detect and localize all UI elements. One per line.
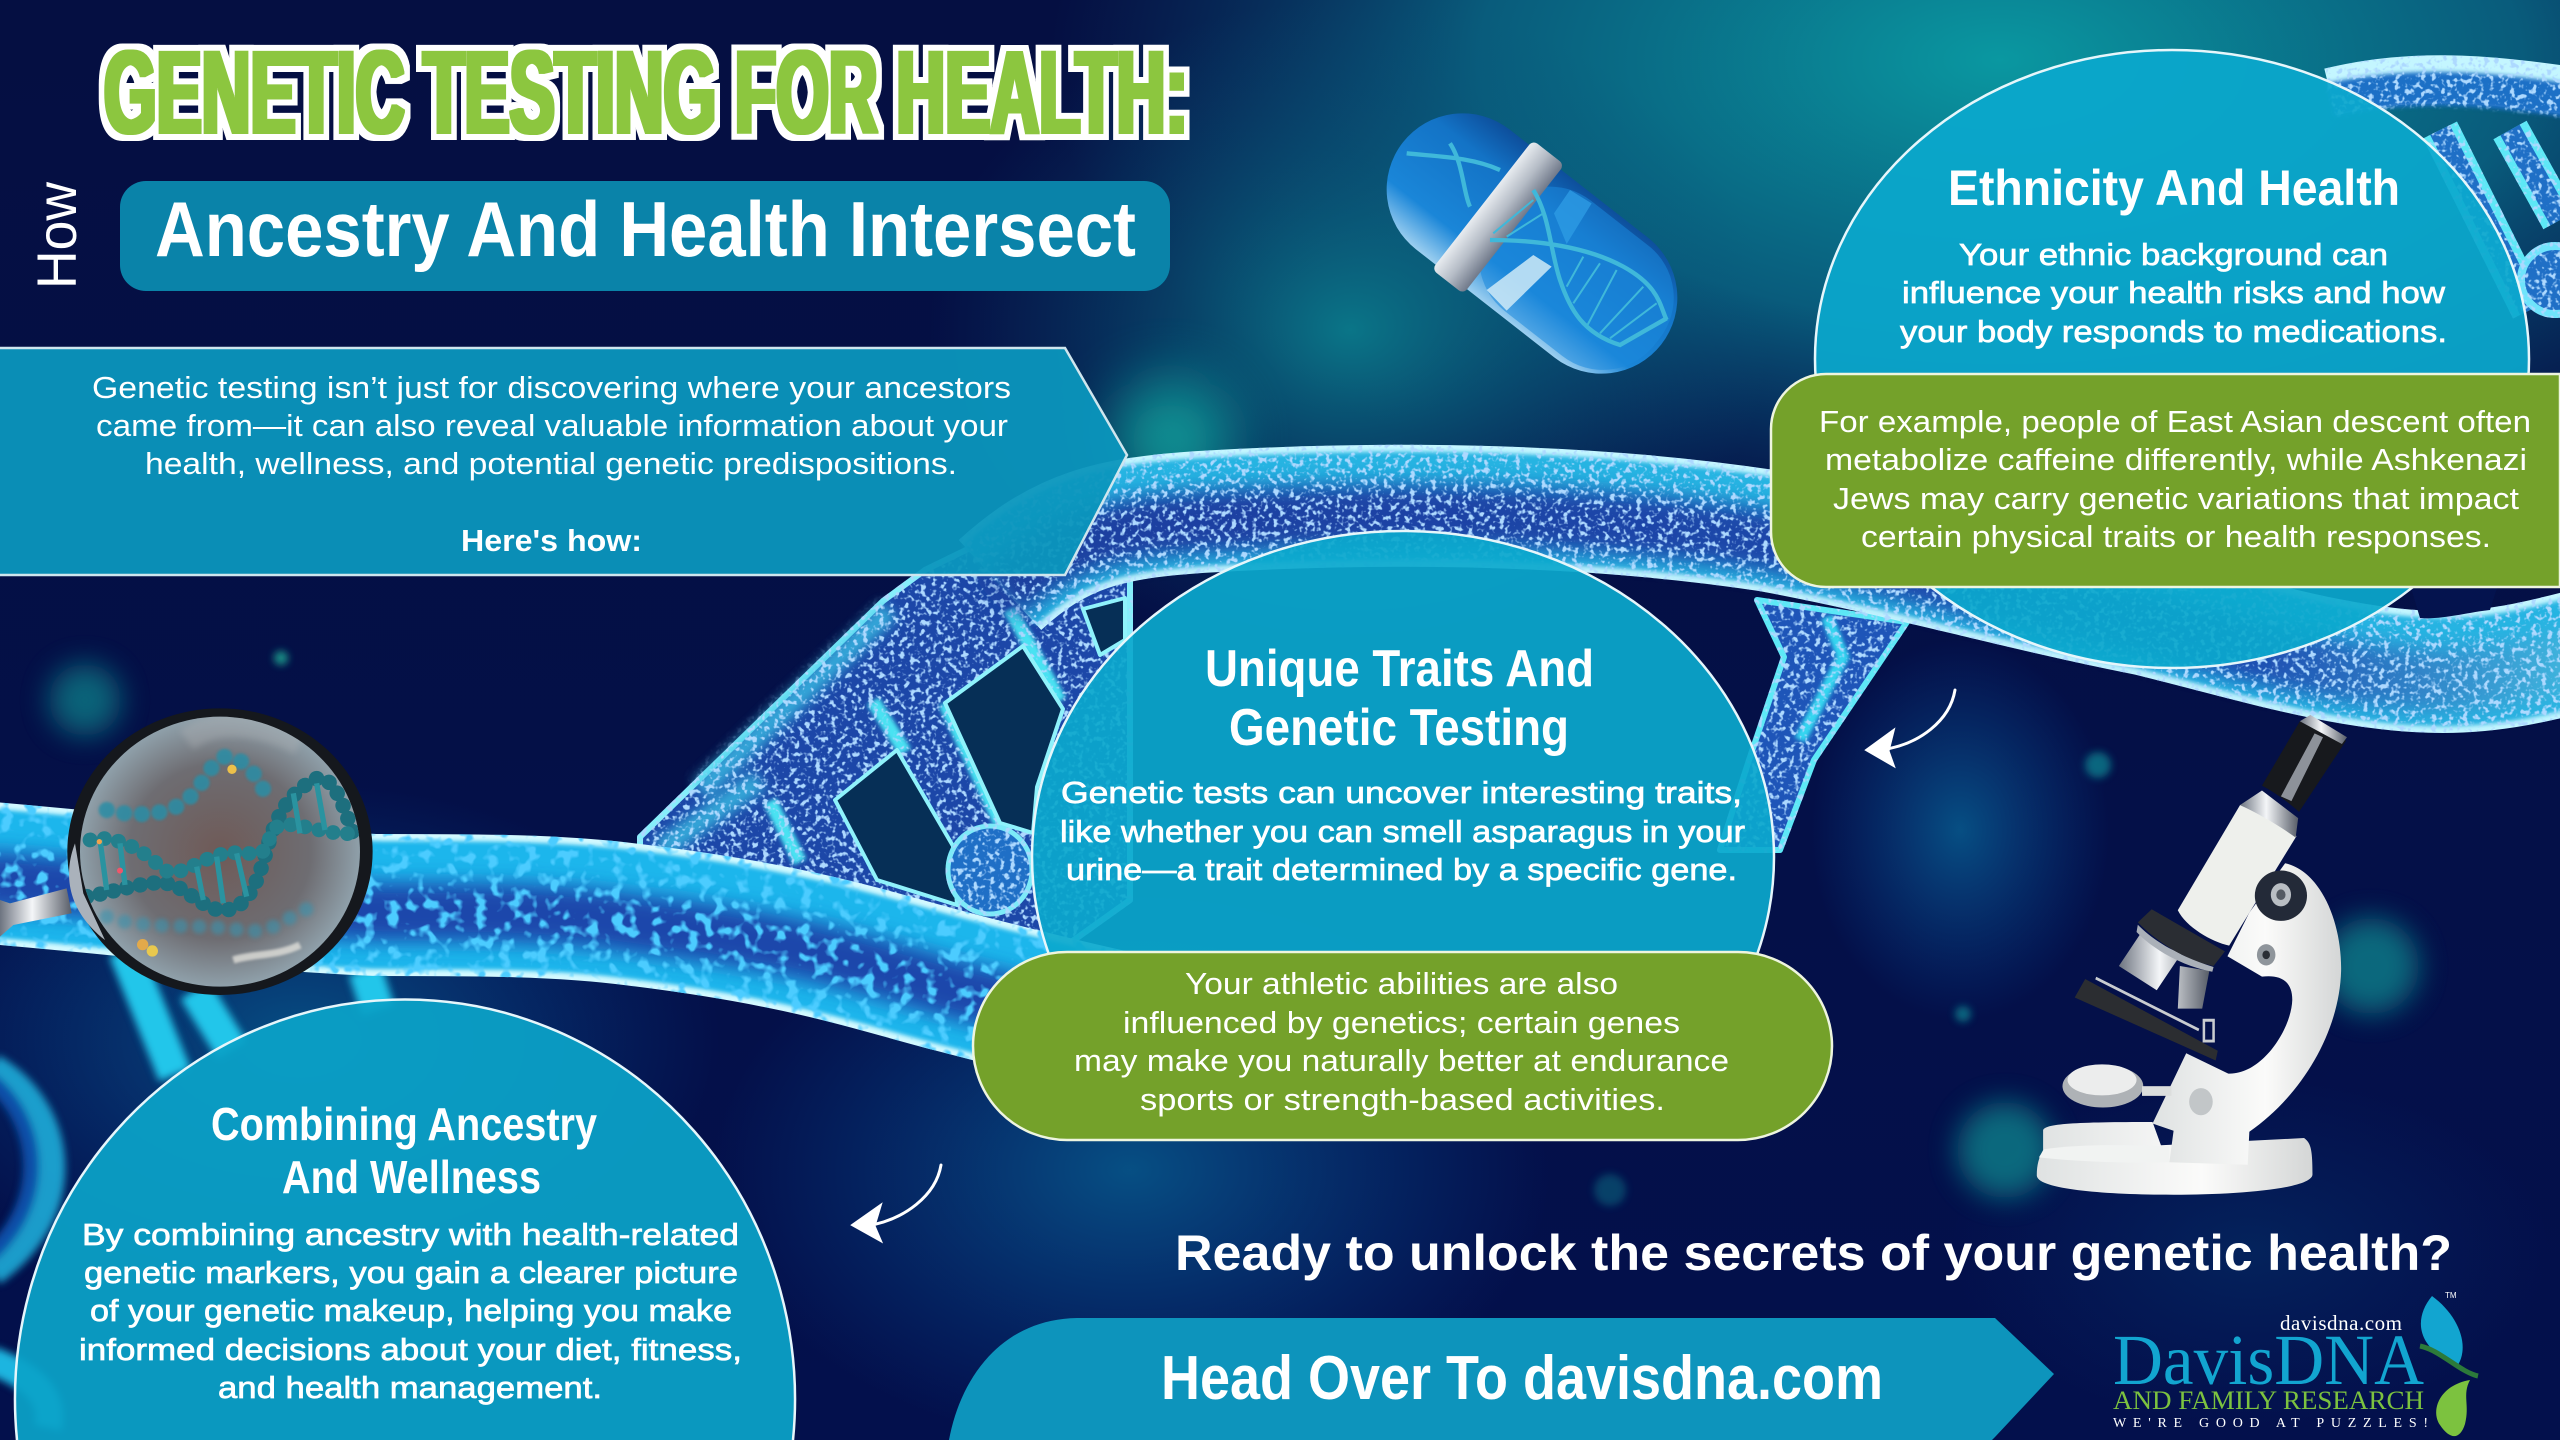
dna strand: main upper [1000, 506, 2560, 680]
microscope body tube [2178, 805, 2296, 946]
panel: intro arrow [0, 348, 1127, 575]
dna strand: main lower [0, 872, 1250, 1056]
microscope eyepiece [2262, 721, 2346, 812]
dna window right [2411, 588, 2497, 618]
body: unique traits: urine—a trait determined by a specific gene. [1066, 852, 1737, 887]
intro text: Genetic testing isn’t just for discovering where your ancestors [92, 370, 1011, 405]
microscope base [2037, 1122, 2312, 1195]
dna knob [948, 826, 1032, 914]
logo: davisdna: WE'RE GOOD AT PUZZLES! [2113, 1416, 2428, 1431]
call to action banner: Head Over To davisdna.com [1161, 1344, 1883, 1413]
body: ethnicity and health: Your ethnic background can [1959, 237, 2388, 272]
body: combining ancestry [79, 1217, 742, 1405]
microscope mirror [2062, 1064, 2171, 1108]
body: ethnicity and health: your body responds to medications. [1900, 314, 2447, 349]
magnifier lens [80, 717, 360, 987]
body: combining ancestry: By combining ancestry with health-related [82, 1217, 739, 1252]
body: combining ancestry: of your genetic makeup, helping you make [90, 1293, 732, 1328]
logo leaves [2420, 1296, 2478, 1436]
callout: east asian and ashkenazi example: For example, people of East Asian descent often [1819, 404, 2531, 439]
call to action banner [949, 1318, 2054, 1440]
dna lower left rungs [0, 950, 378, 1428]
intro text: Here's how: [461, 523, 642, 558]
stage clip [2096, 978, 2214, 1041]
logo: davisdna: DavisDNA [2113, 1320, 2424, 1400]
turret ring [2137, 925, 2214, 972]
magnifier clasp [69, 843, 105, 940]
fine knob [2257, 944, 2275, 965]
dna right rung [1720, 600, 1907, 850]
heading: unique traits [1205, 640, 1594, 757]
heading: unique traits: Genetic Testing [1229, 699, 1569, 757]
logo: davisdna: TM [2445, 1291, 2457, 1300]
microscope collar [2240, 791, 2298, 838]
heading: combining ancestry [211, 1098, 597, 1203]
magnifier handle [0, 888, 72, 937]
heading: ethnicity and health: Ethnicity And Health [1948, 160, 2400, 216]
body: unique traits: Genetic tests can uncover interesting traits, [1061, 775, 1742, 810]
focus knob [2255, 870, 2307, 921]
logo: davisdna: davisdna.com [2280, 1311, 2402, 1335]
dna ladder windows [835, 598, 1125, 905]
eyepiece cap [2300, 715, 2347, 744]
callout: athletic abilities: sports or strength-based activities. [1140, 1082, 1665, 1117]
intro text: came from—it can also reveal valuable information about your [96, 408, 1008, 443]
microscope objectives [2119, 934, 2209, 1009]
arrow: pointing to ethnicity [1867, 690, 1955, 765]
logo: davisdna [2113, 1291, 2478, 1436]
logo: davisdna: AND FAMILY RESEARCH [2113, 1386, 2424, 1415]
microscope stage [2075, 979, 2218, 1060]
body: combining ancestry: and health management. [218, 1370, 602, 1405]
pivot screw [2189, 1088, 2213, 1115]
body: unique traits [1060, 775, 1745, 887]
body: ethnicity and health [1900, 237, 2447, 349]
callout: east asian and ashkenazi example: metabolize caffeine differently, while Ashkenazi [1825, 442, 2527, 477]
body: combining ancestry: genetic markers, you gain a clearer picture [84, 1255, 738, 1290]
icon: dna capsule [1352, 78, 1712, 409]
callout: east asian and ashkenazi example: Jews may carry genetic variations that impact [1833, 481, 2519, 516]
icon: microscope [2037, 715, 2347, 1195]
panel: unique traits and genetic testing [973, 531, 1832, 1183]
magnifier rim [67, 708, 373, 995]
heading: combining ancestry: Combining Ancestry [211, 1098, 597, 1150]
magnifier dna [87, 725, 353, 960]
microscope turret [2138, 909, 2225, 966]
title: GENETIC TESTING FOR HEALTH: [104, 27, 1188, 159]
panel: ethnicity and health [1771, 50, 2560, 668]
dna ladder segment [640, 470, 1130, 950]
microscope arm [2153, 863, 2341, 1165]
callout: east asian and ashkenazi example [1771, 374, 2560, 587]
body: ethnicity and health: influence your health risks and how [1902, 275, 2446, 310]
callout: athletic abilities: influenced by genetics; certain genes [1123, 1005, 1680, 1040]
body: combining ancestry: informed decisions about your diet, fitness, [79, 1332, 742, 1367]
subtitle word: How: How [25, 181, 88, 289]
body: unique traits: like whether you can smell asparagus in your [1060, 814, 1745, 849]
arrow: pointing to combining ancestry [853, 1165, 941, 1240]
callout: east asian and ashkenazi example: certain physical traits or health responses. [1861, 519, 2491, 554]
capsule dna and highlights [1407, 143, 1667, 345]
callout: athletic abilities: Your athletic abilities are also [1185, 966, 1618, 1001]
intro text: health, wellness, and potential genetic predispositions. [145, 446, 957, 481]
callout: athletic abilities: may make you naturally better at endurance [1074, 1043, 1729, 1078]
panel: combining ancestry and wellness [15, 1000, 795, 1440]
heading: combining ancestry: And Wellness [282, 1151, 541, 1203]
heading: unique traits: Unique Traits And [1205, 640, 1594, 698]
eyepiece highlight [2281, 733, 2323, 801]
dna strand: top right [2330, 79, 2560, 314]
callout: athletic abilities [973, 952, 1832, 1140]
call to action question: Ready to unlock the secrets of your genetic health? [1175, 1225, 2452, 1281]
icon: magnifying glass with dna [0, 708, 373, 995]
intro text [92, 370, 1011, 558]
subtitle banner: Ancestry And Health Intersect [155, 185, 1136, 273]
